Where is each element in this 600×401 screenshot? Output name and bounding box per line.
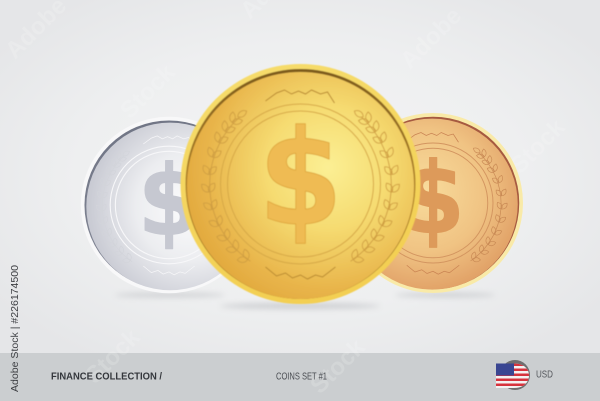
footer title: FINANCE COLLECTION /	[51, 372, 162, 382]
silver dollar sign: $	[138, 144, 200, 257]
watermark: Adobe	[395, 2, 467, 74]
gold laurels	[199, 109, 402, 267]
gold dollar sign: $	[258, 101, 343, 255]
watermark: Stock	[80, 323, 146, 389]
silver coin	[81, 117, 257, 293]
currency label: USD	[536, 370, 553, 380]
watermark: Stock	[505, 113, 571, 179]
coin shadows	[115, 292, 495, 309]
silver wave lines	[143, 136, 195, 275]
gold rings	[220, 104, 380, 264]
gold coin	[180, 64, 420, 304]
watermark: Stock	[305, 333, 371, 399]
icon: US flag	[496, 360, 530, 390]
watermark: Stock	[115, 58, 181, 124]
bronze coin	[343, 113, 523, 293]
bronze laurel	[468, 146, 509, 266]
gold wave lines	[266, 90, 336, 279]
stock id side text: Adobe Stock | #226174500	[9, 265, 21, 392]
footer subtitle: COINS SET #1	[276, 372, 327, 382]
bronze wave lines	[407, 132, 459, 274]
bronze dollar sign: $	[401, 142, 465, 257]
silver rings	[110, 146, 228, 264]
bronze rings	[373, 143, 493, 263]
silver laurel	[95, 150, 135, 266]
footer band	[0, 353, 600, 401]
